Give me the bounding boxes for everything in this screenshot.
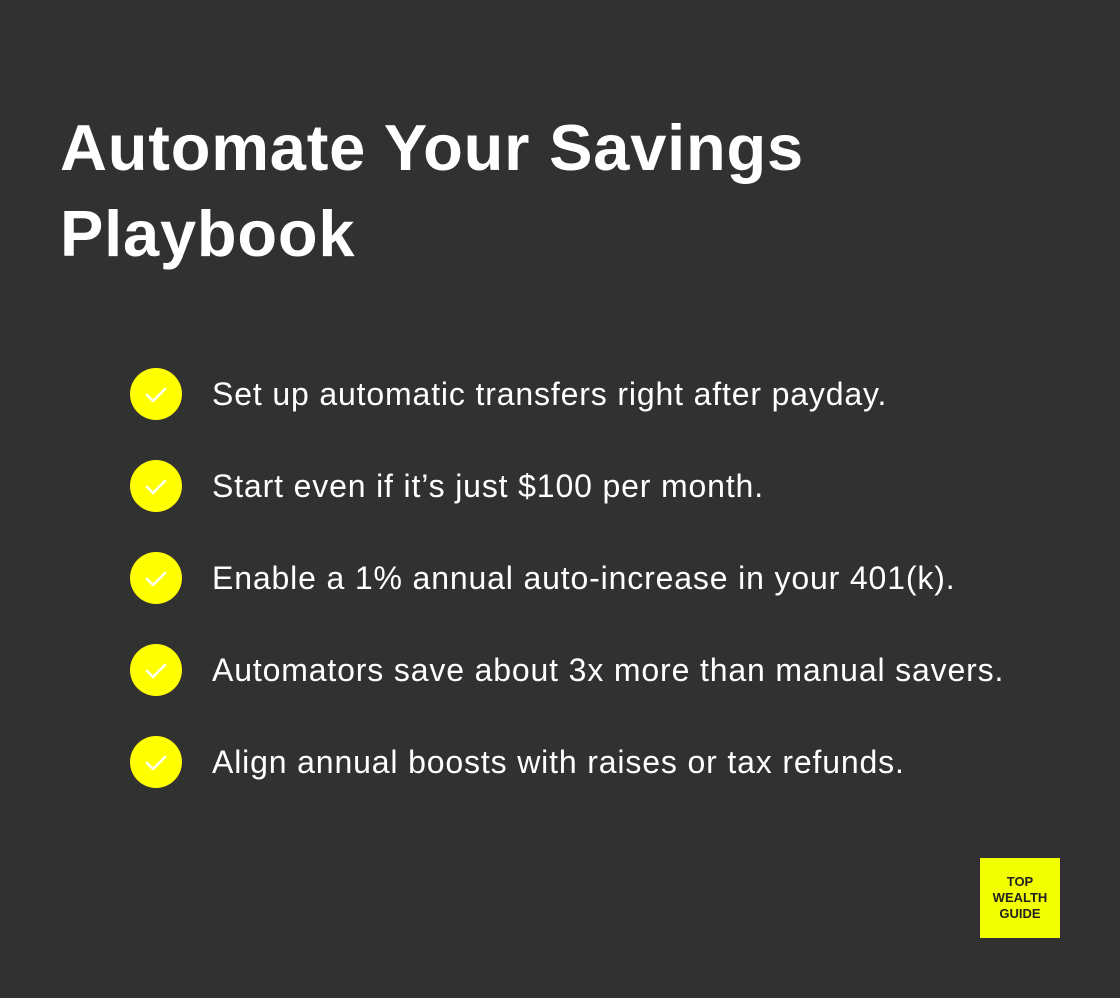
- logo: [980, 858, 1060, 938]
- title: Playbook: [60, 197, 355, 270]
- list item 1: [130, 368, 887, 420]
- title: [60, 111, 804, 270]
- list item 5: [130, 736, 905, 788]
- logo: GUIDE: [999, 906, 1041, 921]
- list item 3: Enable a 1% annual auto-increase in your 401(k).: [212, 560, 955, 596]
- icon: check: [130, 736, 182, 788]
- icon: check: [130, 552, 182, 604]
- list item 4: [130, 644, 1004, 696]
- list item 1: Set up automatic transfers right after payday.: [212, 376, 887, 412]
- logo: TOP: [1007, 874, 1033, 889]
- icon: check: [130, 644, 182, 696]
- logo: WEALTH: [993, 890, 1047, 905]
- list item 4: Automators save about 3x more than manual savers.: [212, 652, 1004, 688]
- title: Automate Your Savings: [60, 111, 804, 184]
- list item 2: [130, 460, 764, 512]
- icon: check: [130, 460, 182, 512]
- icon: check: [130, 368, 182, 420]
- list item 2: Start even if it’s just $100 per month.: [212, 468, 764, 504]
- list item 5: Align annual boosts with raises or tax refunds.: [212, 744, 905, 780]
- list item 3: [130, 552, 955, 604]
